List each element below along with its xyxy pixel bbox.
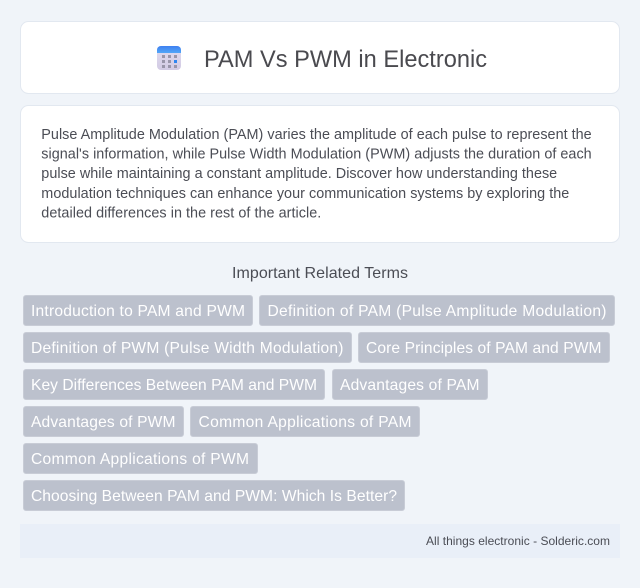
tag: introduction (24, 296, 252, 326)
text block: description (41, 127, 592, 221)
footer: All things electronic - Solderic.com (426, 534, 610, 548)
text block: description: pulse while maintaining a constant amplitude. Discover how understanding these (41, 166, 557, 182)
text block: description: detailed differences in the rest of the article. (41, 205, 321, 221)
footer (20, 524, 620, 558)
tag: choosing: Choosing Between PAM and PWM: Which Is Better? (31, 488, 397, 505)
tag: advantages of PAM: Advantages of PAM (340, 377, 480, 394)
tag: choosing (24, 480, 404, 510)
tag: applications of PWM: Common Applications of PWM (31, 451, 249, 468)
tag: introduction: Introduction to PAM and PWM (31, 303, 245, 320)
tag: advantages of PWM: Advantages of PWM (31, 414, 176, 431)
tag: applications of PAM: Common Applications of PAM (198, 414, 412, 431)
panel: term tags (24, 296, 614, 510)
tag: definition of PWM (24, 332, 352, 362)
panel: description (20, 106, 620, 242)
heading: important related terms: Important Related Terms (232, 265, 408, 282)
tag: applications of PAM (190, 406, 420, 436)
tag: advantages of PAM (332, 370, 488, 400)
title: PAM Vs PWM in Electronic (204, 47, 487, 73)
tag: core principles: Core Principles of PAM and PWM (366, 340, 602, 357)
tag: definition of PWM: Definition of PWM (Pulse Width Modulation) (31, 340, 344, 357)
text block: description: signal's information, while Pulse Width Modulation (PWM) adjusts the duration of each (41, 147, 592, 163)
tag: applications of PWM (24, 444, 258, 474)
icon: calendar (157, 46, 181, 70)
tag: definition of PAM: Definition of PAM (Pulse Amplitude Modulation) (268, 303, 606, 320)
tag: definition of PAM (260, 296, 614, 326)
tag: core principles (358, 332, 610, 362)
text block: description: modulation techniques can enhance your communication systems by exploring the (41, 186, 569, 202)
tag: key differences: Key Differences Between PAM and PWM (31, 377, 317, 394)
text block: description: Pulse Amplitude Modulation (PAM) varies the amplitude of each pulse to represent the (41, 127, 592, 143)
tag: key differences (24, 370, 324, 400)
panel: header (20, 22, 620, 94)
tag: advantages of PWM (24, 406, 184, 436)
